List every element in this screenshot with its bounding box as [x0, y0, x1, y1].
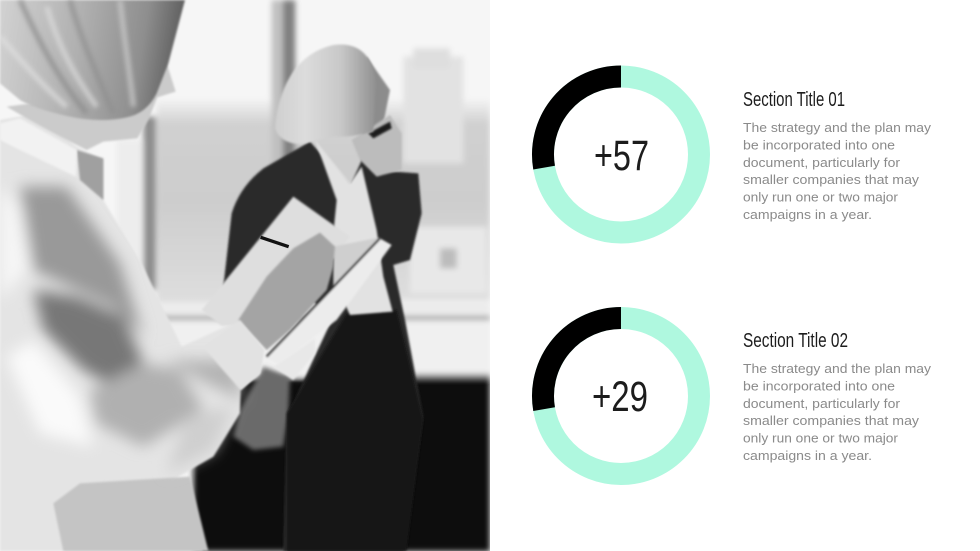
text block 2: [743, 330, 932, 463]
body: [743, 120, 932, 222]
lower shirt: [53, 477, 208, 551]
body: be incorporated into one: [743, 137, 895, 152]
heading: Section Title 02: [743, 330, 848, 352]
body: The strategy and the plan may: [743, 361, 932, 376]
body: smaller companies that may: [743, 413, 920, 428]
body: be incorporated into one: [743, 378, 895, 393]
cuff: [212, 320, 262, 391]
hair: [0, 0, 185, 120]
neck and face: [7, 63, 176, 150]
hair: [275, 45, 376, 144]
ring: black segment: [543, 76, 621, 168]
hand: [238, 233, 335, 350]
shirt folds: [0, 187, 243, 473]
photo: two women in black and white at an office window: [0, 0, 490, 551]
lower jacket: [233, 367, 290, 450]
value: +57: [594, 132, 649, 180]
heading: Section Title 01: [743, 89, 845, 111]
body: document, particularly for: [743, 396, 901, 411]
ring: black segment: [543, 318, 621, 409]
body: only run one or two major: [743, 431, 899, 446]
body: smaller companies that may: [743, 172, 920, 187]
body: campaigns in a year.: [743, 448, 872, 463]
face: [366, 56, 392, 126]
donut chart 2: [543, 318, 699, 474]
jacket: [223, 142, 423, 551]
donut chart 1: [543, 76, 699, 232]
hand and phone: [352, 115, 402, 177]
body: document, particularly for: [743, 155, 901, 170]
body: The strategy and the plan may: [743, 120, 932, 135]
body: campaigns in a year.: [743, 207, 872, 222]
ring: mint segment: [543, 76, 699, 232]
blurred window background: [117, 0, 490, 551]
collar: [77, 150, 103, 200]
woman on the phone: [223, 45, 423, 551]
trousers: [287, 310, 423, 551]
pen: [261, 237, 289, 247]
shirt: [315, 140, 393, 315]
ring: mint segment: [543, 318, 699, 474]
body: [743, 361, 932, 463]
notebook: [202, 197, 392, 380]
body: only run one or two major: [743, 190, 899, 205]
value: +29: [592, 373, 648, 421]
text block 1: [743, 89, 932, 222]
woman writing in a notebook: [0, 0, 392, 551]
shirt: [0, 113, 263, 551]
